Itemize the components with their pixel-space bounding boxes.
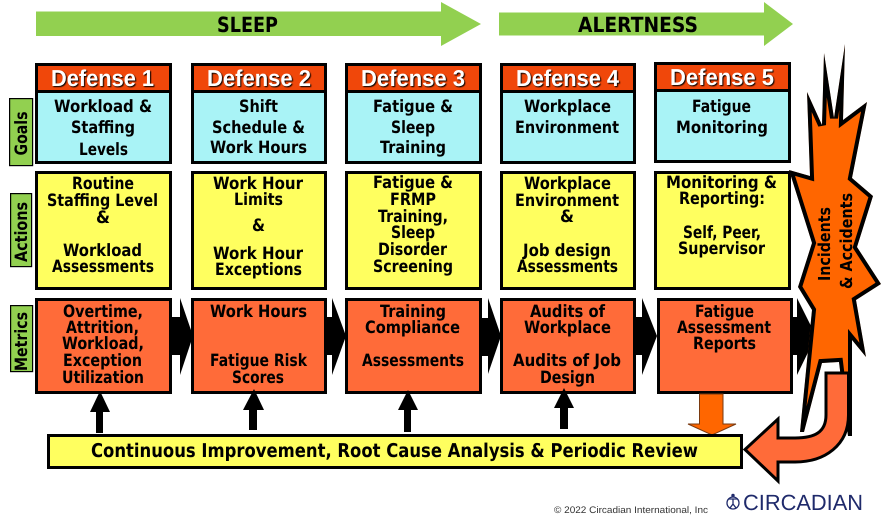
arrow: sleep — [36, 2, 481, 46]
panel: defense 3 actions: FRMP — [390, 190, 436, 210]
panel: defense 4 metrics: Workplace — [524, 318, 611, 338]
arrow: sleep: SLEEP — [217, 13, 278, 37]
panel: defense 3 metrics — [346, 300, 480, 392]
panel: defense 4 actions: Workplace — [524, 174, 611, 194]
panel: defense 1 goal — [36, 64, 170, 162]
arrow: metric 4 to 5 — [634, 298, 657, 375]
panel: defense 4 goal: Workplace — [524, 97, 611, 117]
panel: defense 5 goal: Defense 5 — [670, 64, 774, 90]
panel: defense 4 metrics: Audits of Job — [513, 351, 621, 371]
panel: defense 3 metrics: Compliance — [365, 318, 460, 338]
panel: defense 4 actions: Assessments — [517, 257, 618, 277]
panel: defense 3 goal: Sleep — [391, 118, 435, 138]
panel: defense 1 metrics — [36, 300, 170, 392]
panel: defense 3 goal — [346, 64, 480, 162]
arrow: metric 5 to incidents — [791, 298, 816, 375]
arrow: metric 1 to 2 — [170, 298, 193, 375]
panel: defense 3 actions — [346, 172, 480, 288]
panel: defense 3 goal: Training — [380, 138, 446, 158]
panel: defense 4 goal — [502, 64, 634, 162]
panel: defense 5 metrics — [658, 300, 792, 392]
panel: defense 2 metrics: Scores — [232, 368, 284, 388]
panel: defense 3 goal: Defense 3 — [361, 65, 465, 91]
panel: defense 5 metrics: Assessment — [677, 318, 771, 338]
arrow: metric 3 to 4 — [480, 298, 501, 374]
panel: defense 4 metrics — [502, 300, 634, 392]
panel: defense 5 actions: Monitoring & — [666, 173, 777, 193]
panel: defense 2 actions: Limits — [234, 190, 283, 210]
panel: defense 1 actions: Assessments — [52, 257, 154, 277]
panel: defense 2 actions: Exceptions — [215, 260, 302, 280]
panel: defense 2 metrics: Fatigue Risk — [210, 351, 308, 371]
burst: incidents and accidents — [789, 44, 881, 436]
panel: defense 2 metrics: Work Hours — [210, 302, 307, 322]
panel: defense 1 metrics: Attrition, — [66, 318, 139, 338]
panel: defense 1 goal: Defense 1 — [51, 65, 154, 91]
burst: incidents and accidents: Incidents — [815, 207, 834, 281]
panel: defense 2 goal: Shift — [239, 97, 278, 117]
copyright: © 2022 Circadian International, Inc — [554, 505, 708, 516]
panel: continuous improvement — [48, 436, 742, 468]
panel: defense 3 actions: Training, — [378, 207, 448, 227]
panel: defense 2 actions: Work Hour — [213, 244, 304, 264]
panel: defense 4 goal: Environment — [515, 118, 619, 138]
panel: defense 1 actions: Routine — [72, 174, 134, 194]
panel: defense 5 actions: Reporting: — [679, 189, 765, 209]
panel: continuous improvement: Continuous Improvement, Root Cause Analysis & Periodic Review — [91, 440, 698, 462]
panel: defense 2 goal — [192, 64, 326, 162]
label: goals — [10, 99, 33, 166]
panel: defense 5 goal — [656, 64, 790, 162]
panel: defense 2 metrics — [192, 300, 326, 392]
panel: defense 4 actions: Environment — [515, 191, 619, 211]
panel: defense 2 actions: & — [252, 216, 265, 236]
arrow: reports to improvement — [688, 394, 736, 435]
panel: defense 1 actions: Staffing Level — [47, 191, 158, 211]
panel: defense 1 actions: & — [96, 208, 110, 228]
arrow: improvement to metric 1 — [90, 391, 110, 433]
label: goals: Goals — [12, 112, 32, 156]
panel: defense 2 goal: Schedule & — [212, 118, 305, 138]
panel: defense 3 actions: Screening — [373, 257, 453, 277]
panel: defense 1 goal: Workload & — [54, 97, 152, 117]
panel: defense 1 metrics: Overtime, — [63, 302, 143, 322]
panel: defense 4 metrics: Design — [540, 368, 595, 388]
panel: defense 1 actions — [36, 172, 170, 288]
panel: defense 5 actions — [656, 172, 790, 288]
panel: defense 1 goal: Staffing — [71, 118, 135, 138]
arrow: alertness: ALERTNESS — [578, 13, 698, 37]
panel: defense 2 goal: Defense 2 — [207, 65, 311, 91]
arrow: incidents feedback curve — [745, 373, 848, 481]
panel: defense 3 actions: Fatigue & — [373, 173, 453, 193]
panel: defense 3 actions: Disorder — [378, 240, 448, 260]
panel: defense 5 metrics: Reports — [693, 334, 756, 354]
panel: defense 2 actions: Work Hour — [213, 174, 304, 194]
label: metrics: Metrics — [12, 312, 32, 371]
panel: defense 1 metrics: Utilization — [62, 368, 144, 388]
panel: defense 1 actions: Workload — [63, 241, 142, 261]
panel: defense 5 metrics: Fatigue — [695, 302, 754, 322]
panel: defense 1 goal: Levels — [79, 140, 128, 160]
panel: defense 2 goal: Work Hours — [210, 138, 307, 158]
panel: defense 1 metrics: Workload, — [62, 334, 144, 354]
panel: defense 4 actions: Job design — [522, 241, 611, 261]
panel: defense 5 goal: Monitoring — [676, 118, 768, 138]
panel: defense 5 goal: Fatigue — [692, 97, 751, 117]
arrow: improvement to metric 2 — [243, 389, 264, 430]
panel: defense 4 metrics: Audits of — [530, 302, 606, 322]
panel: defense 3 goal: Fatigue & — [373, 97, 453, 117]
label: actions: Actions — [12, 202, 32, 262]
panel: defense 3 metrics: Training — [380, 302, 446, 322]
arrow: improvement to metric 4 — [554, 388, 574, 429]
panel: defense 5 actions: Supervisor — [678, 239, 766, 259]
panel: defense 4 goal: Defense 4 — [516, 65, 619, 91]
panel: defense 1 metrics: Exception — [63, 351, 142, 371]
logo: circadian: CIRCADIAN — [743, 490, 863, 515]
burst: incidents and accidents: & Accidents — [837, 193, 856, 289]
panel: defense 3 metrics: Assessments — [362, 351, 464, 371]
panel: defense 4 actions: & — [560, 207, 574, 227]
arrow: alertness — [499, 2, 793, 46]
arrow: metric 2 to 3 — [325, 298, 346, 375]
panel: defense 5 actions: Self, Peer, — [683, 223, 761, 243]
panel: defense 4 actions — [502, 172, 634, 288]
panel: defense 2 actions — [192, 172, 326, 288]
panel: defense 3 actions: Sleep — [391, 223, 435, 243]
arrow: improvement to metric 3 — [398, 390, 418, 432]
